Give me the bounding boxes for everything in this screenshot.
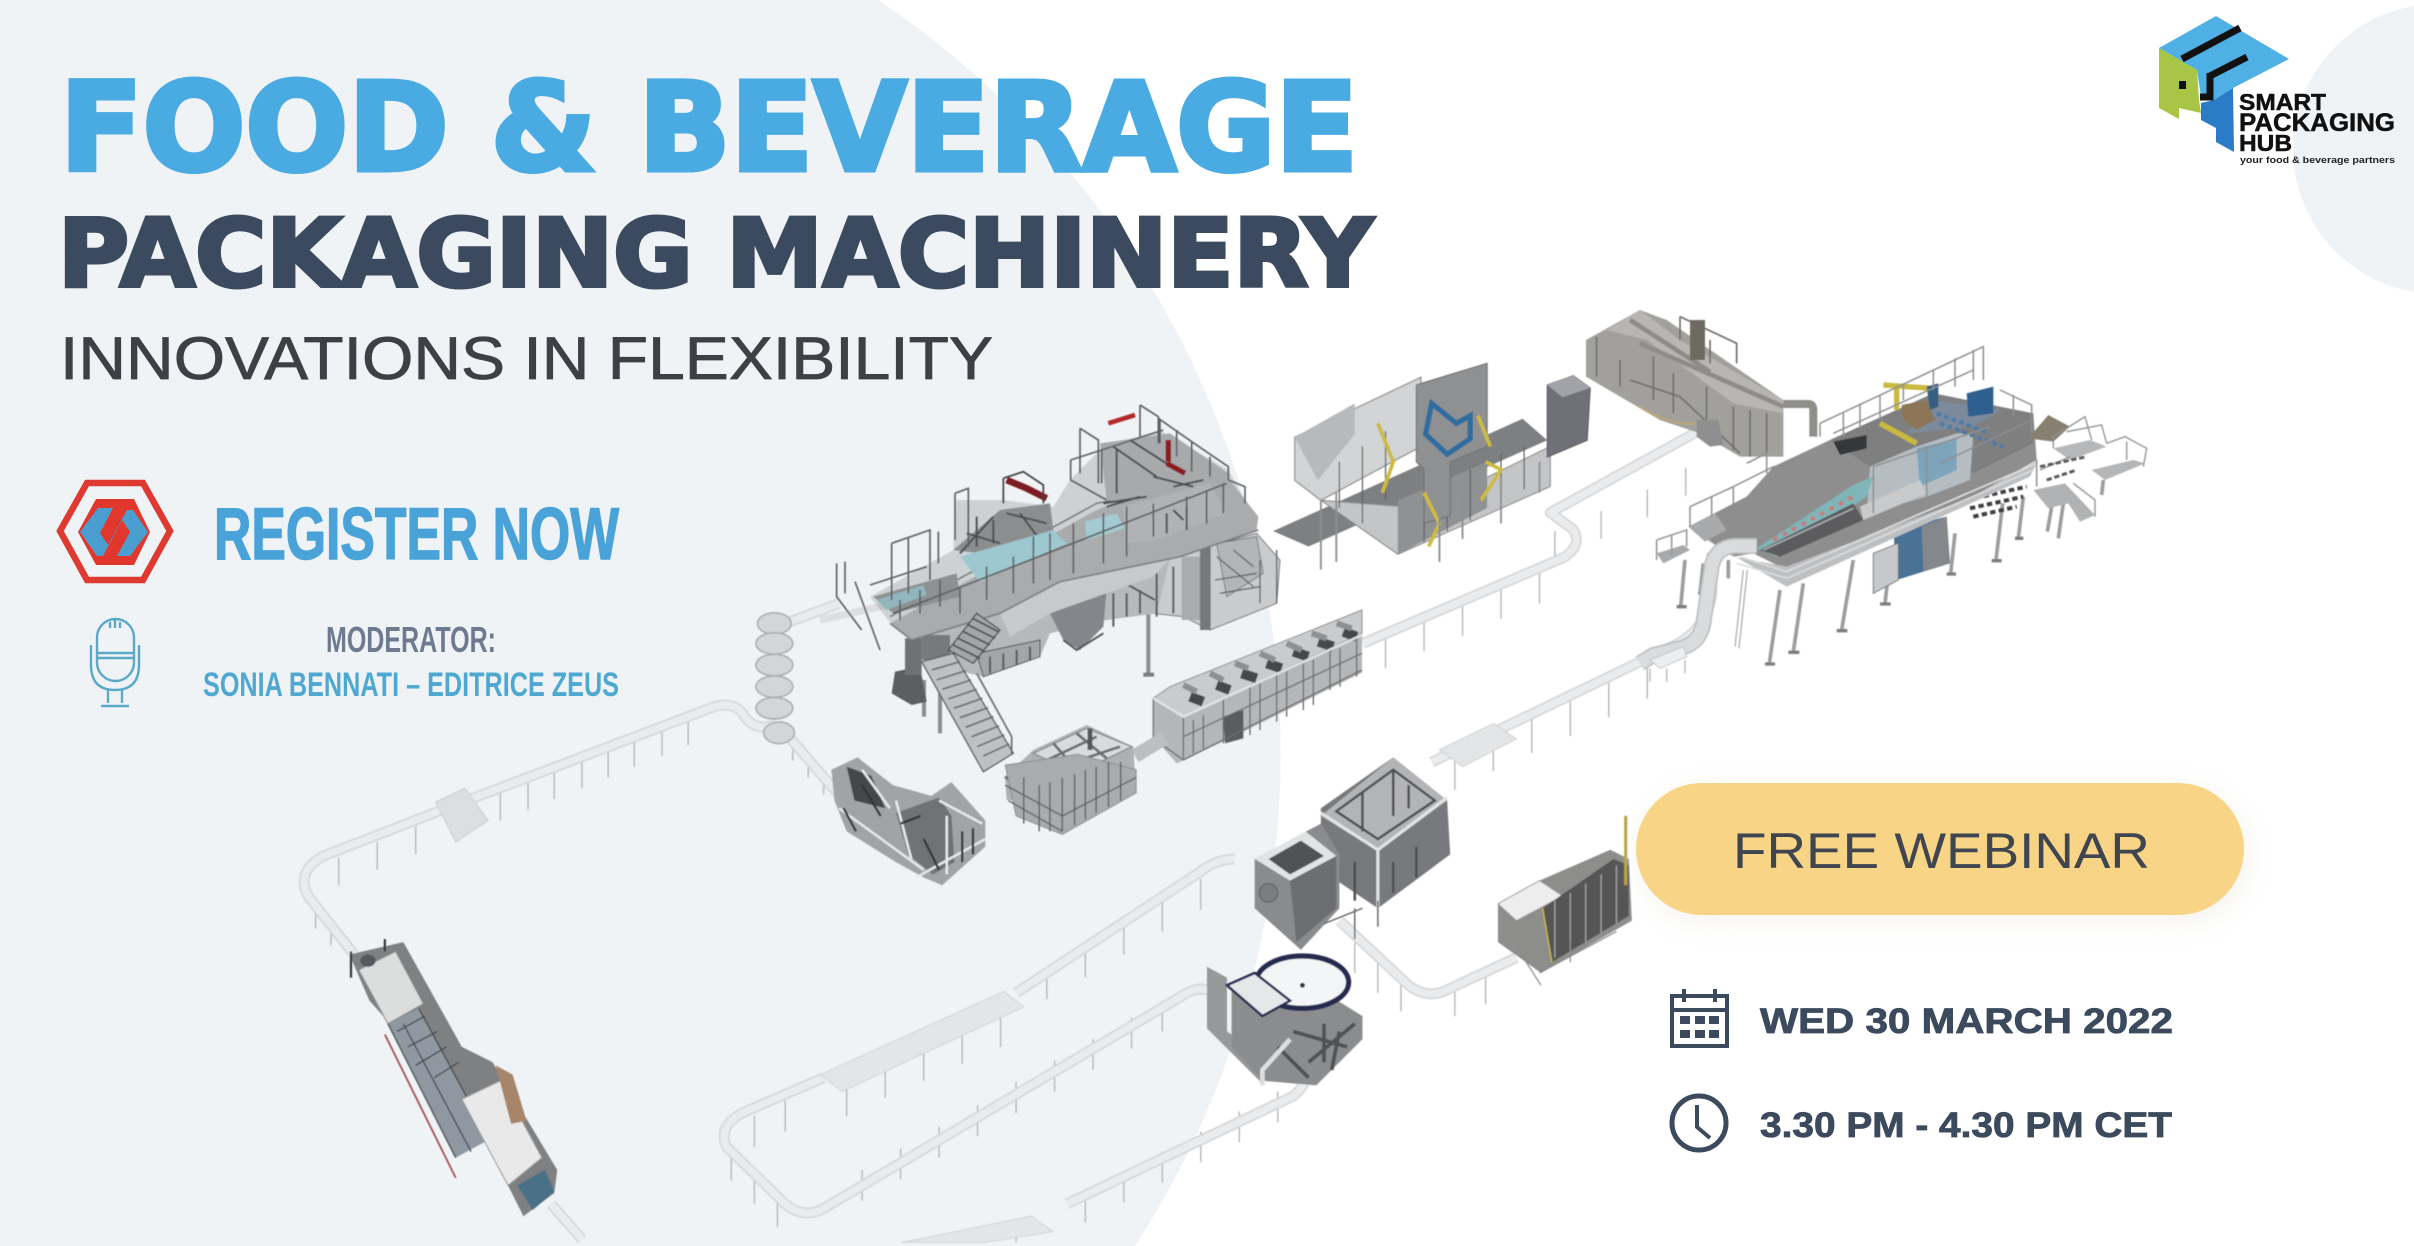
back gantry: [1416, 363, 1487, 523]
logo cube: [2159, 16, 2289, 152]
background circle: left: [0, 0, 1281, 1246]
inlet conveyor stub: [820, 604, 892, 620]
background circle: top right: [2293, 6, 2414, 292]
title: packaging machinery: PACKAGING MACHINERY: [58, 200, 1374, 309]
dark cabinet: [1547, 376, 1590, 457]
tall grey wall: [1295, 377, 1421, 500]
icon: clock: [1672, 1096, 1726, 1150]
cyan infeed and product: [1757, 477, 1873, 557]
machine: bottle feeder: [1498, 816, 1632, 985]
free webinar pill: FREE WEBINAR: [1733, 823, 2150, 879]
date: WED 30 MARCH 2022: [1760, 1002, 2173, 1041]
red robots: [1108, 415, 1135, 423]
wide accumulation sections: [821, 724, 1516, 1242]
title: food & beverage: FOOD & BEVERAGE: [60, 57, 1358, 199]
fences: [1690, 347, 2037, 527]
register now: REGISTER NOW: [214, 494, 619, 575]
machine: rotary unit: [1207, 956, 1362, 1085]
guard frames: [837, 405, 1245, 650]
smart packaging hub logo: PACKAGING: [2239, 109, 2395, 137]
moderator label: MODERATOR:: [326, 619, 496, 660]
subtitle: INNOVATIONS IN FLEXIBILITY: [60, 325, 993, 392]
lower right enclosure: [1140, 533, 1280, 630]
machine: mid bagging module: [1153, 610, 1362, 763]
smart packaging hub logo: [2159, 16, 2395, 166]
yellow robots: [1378, 416, 1501, 547]
smart packaging hub logo: HUB: [2239, 130, 2292, 156]
lower stairs: [922, 653, 1013, 772]
smart packaging hub logo: your food & beverage partners: [2240, 155, 2395, 166]
machine: upper tunnel line and palletiser: [1586, 310, 2147, 682]
machine: central robot cell: [1273, 363, 1590, 570]
conveyor network: [304, 430, 1712, 1242]
machine: main filling platform: [820, 405, 1280, 772]
conveyor link: module 3 to 4: [1135, 738, 1165, 756]
icon: microphone: [91, 619, 139, 706]
right platforms: [2053, 440, 2107, 460]
side landing: [1657, 545, 1690, 563]
platform legs: [1681, 480, 2103, 663]
upper stairs: [948, 613, 1000, 663]
tunnel body: [1586, 310, 1783, 457]
module 3 lower body: [1005, 754, 1136, 834]
base tray: [1321, 446, 1550, 554]
descending conveyor: [1640, 546, 1757, 663]
blue column under deck: [1893, 517, 1950, 580]
spiral tower: [756, 613, 794, 744]
stems: [316, 468, 1686, 1242]
machine: module 3: [1005, 725, 1135, 800]
machine blocks on deck: [953, 503, 1053, 553]
platform deck: [890, 478, 1258, 640]
back cell: [1830, 393, 2033, 473]
glass enclosure: [1867, 433, 1973, 513]
blue arm: [1426, 403, 1470, 454]
underside structures: [910, 558, 1170, 677]
main deck: [1688, 393, 2037, 570]
icon: calendar: [1672, 989, 1727, 1046]
under deck lattice: [1967, 487, 2027, 517]
smart packaging hub logo: SMART: [2239, 89, 2326, 115]
conveyor outlines: [304, 430, 1712, 1239]
time: 3.30 PM - 4.30 PM CET: [1760, 1106, 2172, 1145]
translucent machine band behind frames: [870, 430, 1258, 627]
production line illustration: [304, 310, 2147, 1242]
pallet robot: [1880, 385, 1932, 443]
machine: corner module 2: [831, 757, 985, 885]
machine: upper right casepacker: [1255, 757, 1450, 950]
support legs: [1321, 462, 1540, 570]
transfer belt: [1273, 419, 1547, 547]
icon: hexagon logo: [60, 483, 170, 580]
pole and legs: [924, 600, 1148, 733]
cyan tray: [960, 530, 1067, 582]
front cabinet: [1255, 824, 1339, 950]
machine: long thermoformer: [349, 939, 557, 1216]
free webinar pill: [1636, 783, 2248, 922]
moderator name: SONIA BENNATI – EDITRICE ZEUS: [203, 666, 619, 704]
